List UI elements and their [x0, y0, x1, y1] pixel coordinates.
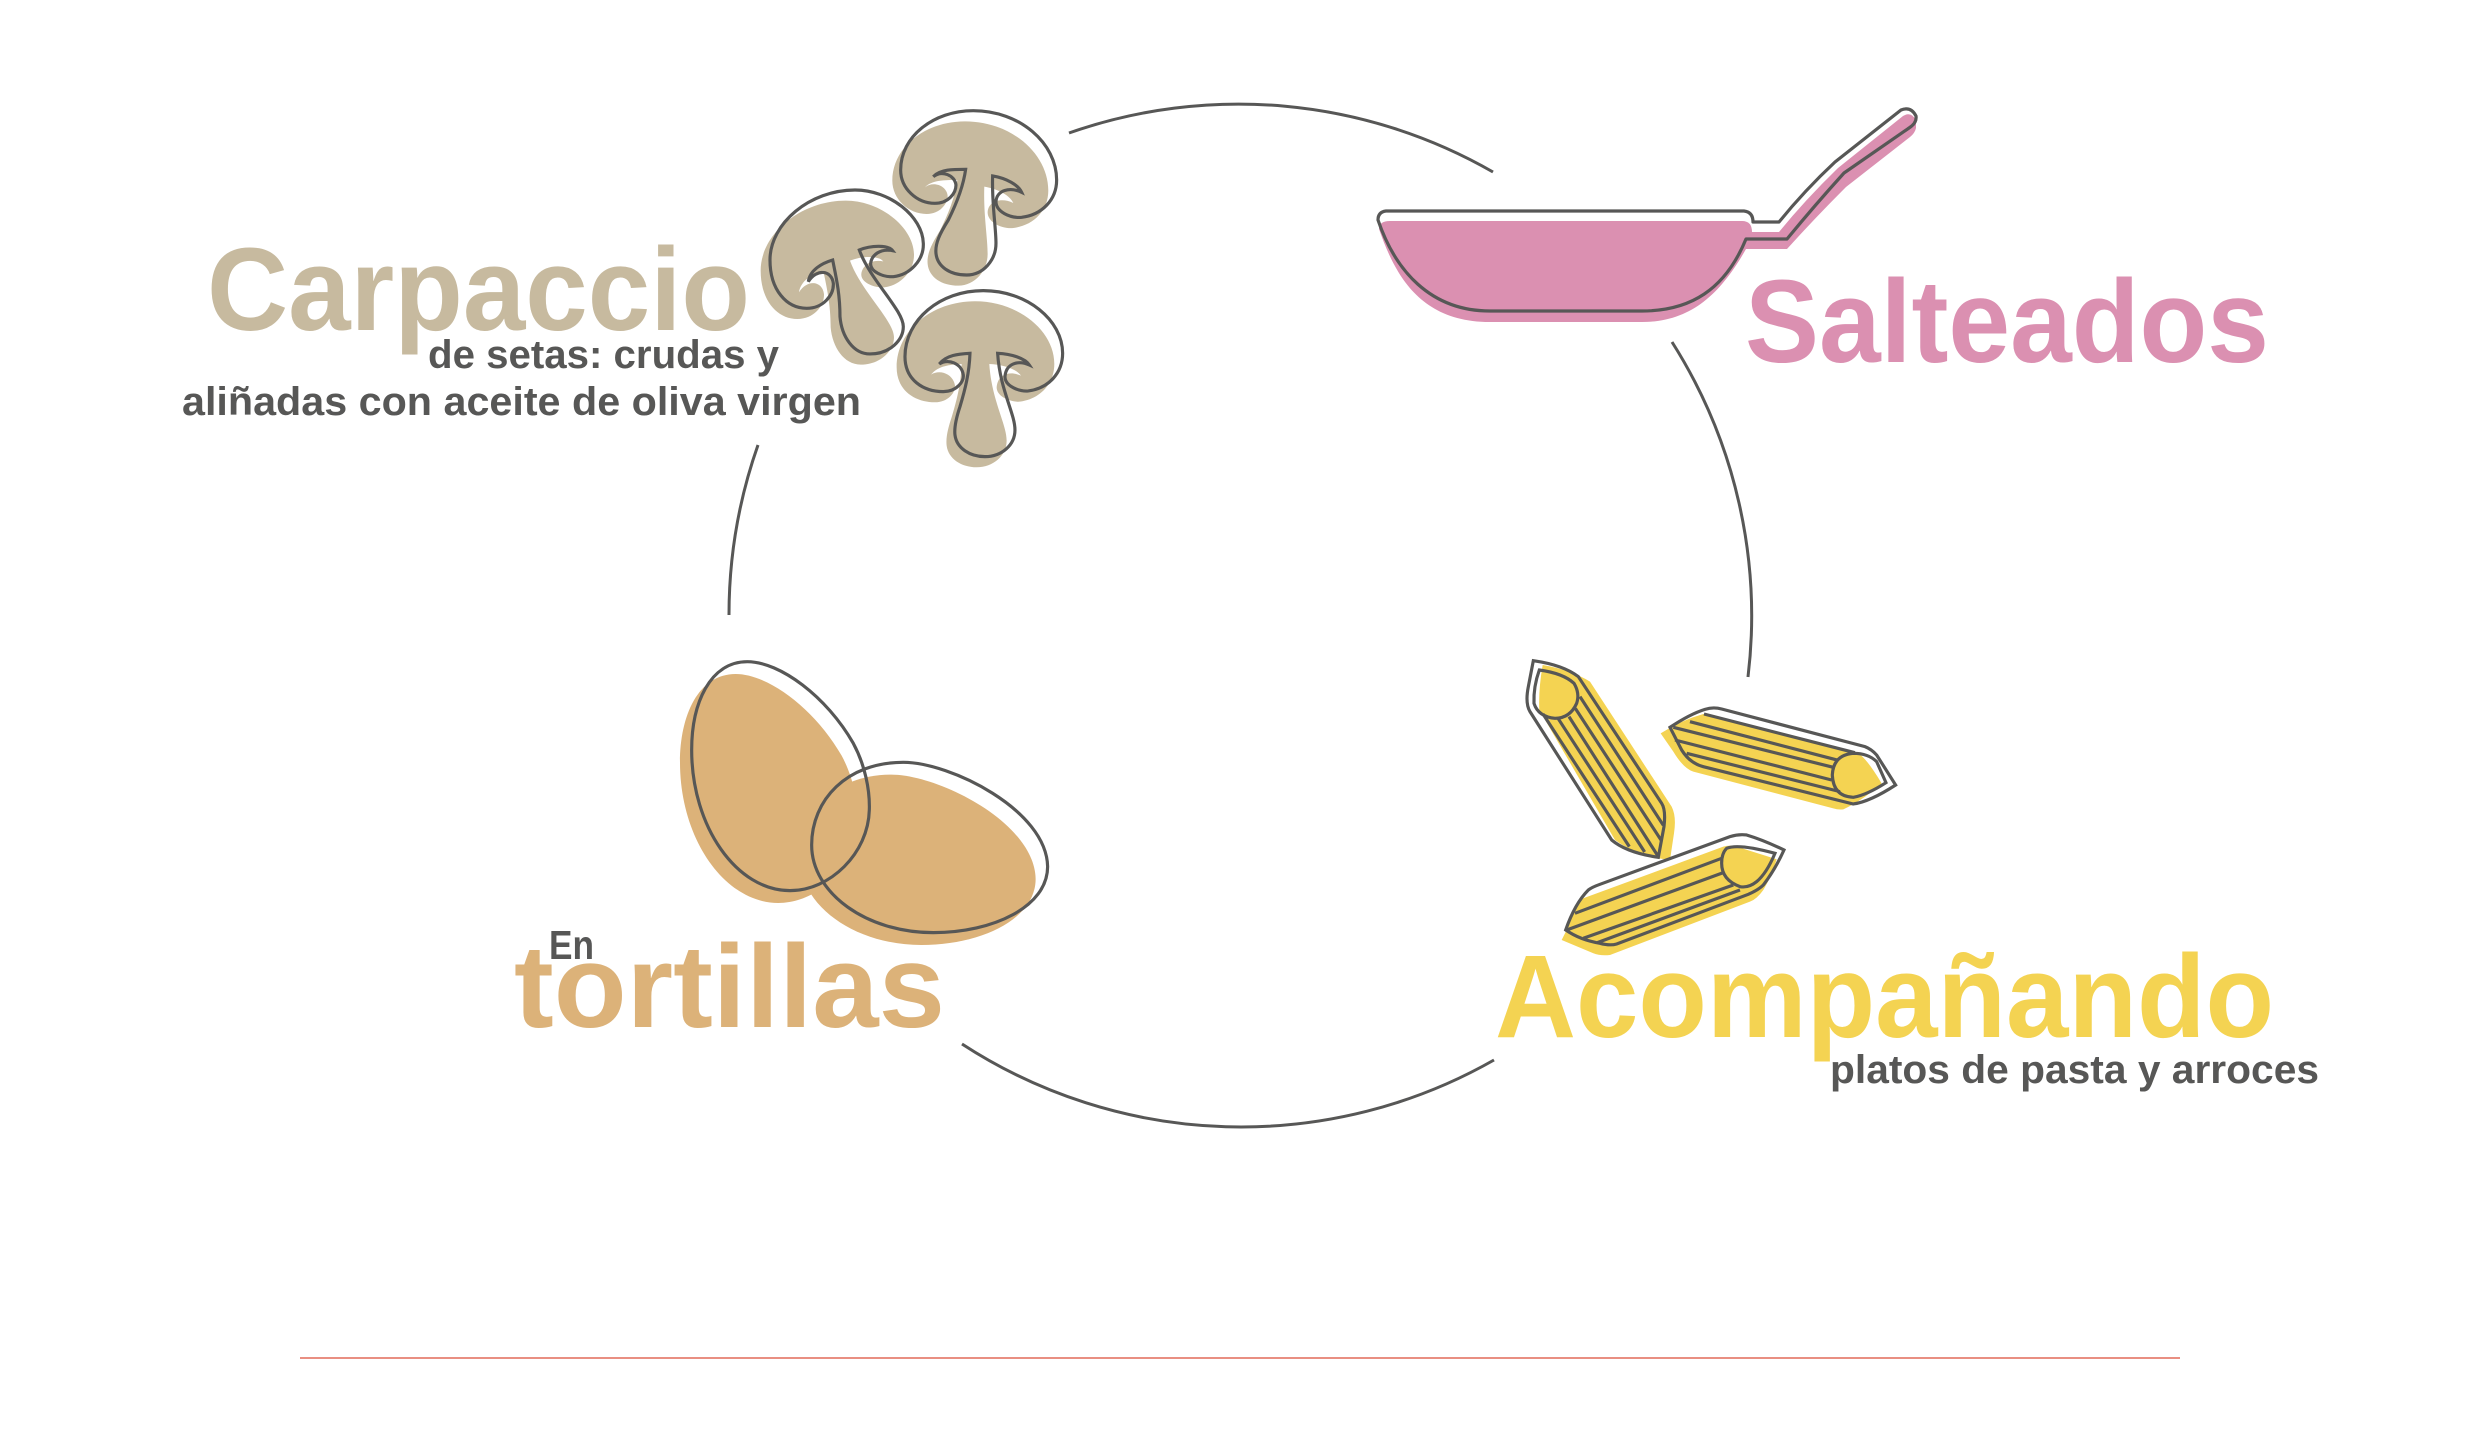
icon: frying pan	[1378, 109, 1916, 322]
mushroom fills	[761, 121, 1054, 467]
heading: Salteados: Salteados	[1745, 256, 2269, 388]
text: En: En	[549, 922, 594, 968]
heading: Carpaccio: Carpaccio	[207, 224, 750, 356]
footer rule	[300, 1357, 2180, 1359]
text block: carpaccio description: de setas: crudas y	[428, 333, 780, 377]
text block: carpaccio description	[182, 333, 861, 424]
heading: Acompañando: Acompañando	[1495, 931, 2274, 1063]
pasta outlines	[1527, 661, 1896, 945]
heading: tortillas: tortillas	[514, 921, 945, 1053]
egg fills	[680, 674, 1036, 945]
pan fill	[1379, 114, 1916, 322]
mushroom outlines	[770, 111, 1063, 457]
cycle ring arcs	[729, 104, 1752, 1127]
icon: eggs	[680, 662, 1048, 945]
icon: penne pasta	[1527, 661, 1896, 955]
icon: mushrooms	[761, 111, 1063, 467]
text block: carpaccio description: aliñadas con aceite de oliva virgen	[182, 380, 861, 424]
pan outline	[1378, 109, 1916, 311]
text block: pasta description: platos de pasta y arroces	[1830, 1048, 2319, 1092]
pasta fills	[1539, 665, 1882, 955]
egg outlines	[692, 662, 1048, 933]
